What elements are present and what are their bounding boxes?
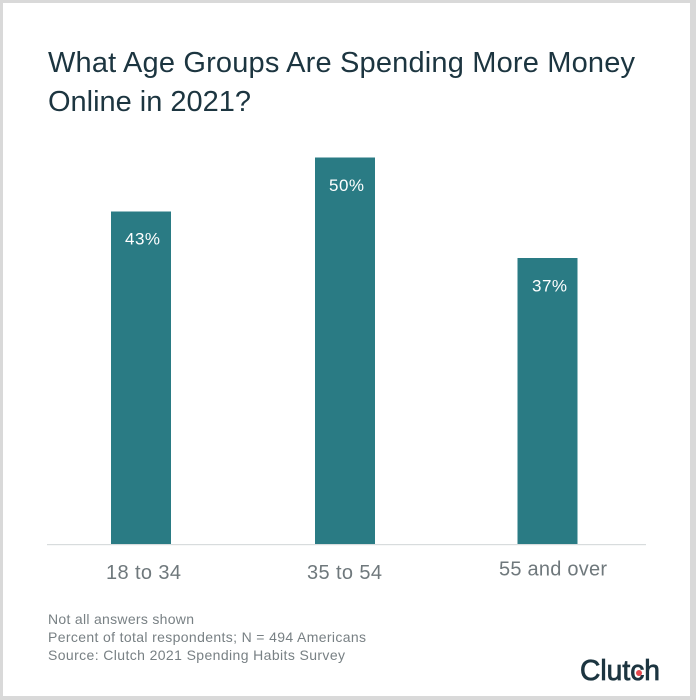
logo red dot <box>636 670 642 676</box>
bar: 35 to 54 <box>315 158 375 544</box>
bar: 18 to 34 <box>111 212 171 544</box>
axis line <box>47 544 646 545</box>
bar: 55 and over <box>518 258 578 544</box>
footnotes: Percent of total respondents; N = 494 Americans <box>48 629 366 645</box>
title: Online in 2021? <box>48 86 251 118</box>
bar: 55 and over: 37% <box>532 276 567 296</box>
logo: Clutch: Clutch <box>580 655 660 687</box>
category labels <box>106 558 607 584</box>
footnotes <box>48 611 366 663</box>
footnotes: Not all answers shown <box>48 611 194 627</box>
title: What Age Groups Are Spending More Money <box>48 47 636 79</box>
bar: 35 to 54: 50% <box>329 176 364 195</box>
bar chart <box>47 158 646 584</box>
footnotes: Source: Clutch 2021 Spending Habits Survey <box>48 647 345 663</box>
title <box>48 47 636 118</box>
bar: 18 to 34: 43% <box>125 230 160 248</box>
category labels: 35 to 54 <box>307 562 382 584</box>
category labels: 18 to 34 <box>106 562 181 584</box>
category labels: 55 and over <box>499 558 607 580</box>
